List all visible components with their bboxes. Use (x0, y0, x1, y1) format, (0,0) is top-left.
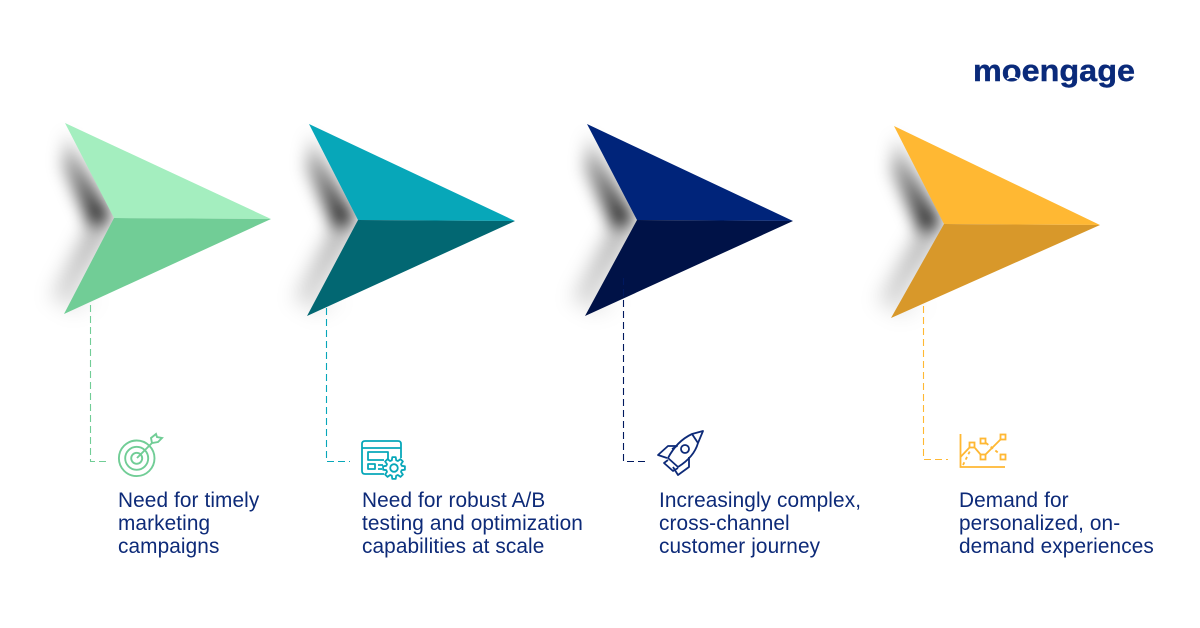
text: step 3: cross-channel (659, 512, 790, 534)
connector 2 (326, 308, 350, 462)
text: step 2: Need for robust A/B (362, 488, 545, 512)
connector 4 (924, 306, 948, 460)
text: step 4: personalized, on- (959, 512, 1120, 534)
text: step 4: demand experiences (959, 534, 1154, 558)
logo: moengage (973, 53, 1135, 88)
icon: browser with gear (362, 441, 405, 479)
text: step 1: campaigns (118, 534, 219, 558)
icon: target (119, 434, 162, 476)
arrow 4: yellow (877, 126, 1100, 318)
text: step 1 (118, 488, 260, 558)
text: step 2: capabilities at scale (362, 534, 544, 558)
text: step 3 (659, 488, 861, 558)
text: step 2 (362, 488, 583, 558)
text: step 3: customer journey (659, 534, 820, 558)
icon: chart (960, 434, 1006, 467)
text: step 1: marketing (118, 512, 210, 534)
text: step 3: Increasingly complex, (659, 488, 861, 512)
arrow 2: teal (293, 124, 515, 316)
text: step 4: Demand for (959, 488, 1069, 512)
connector 3 (624, 278, 648, 462)
text: step 2: testing and optimization (362, 512, 583, 534)
arrow 1: green (50, 123, 271, 314)
arrow 3: navy (571, 124, 793, 316)
text: step 4 (959, 488, 1154, 558)
connector 1 (90, 305, 110, 462)
icon: rocket (658, 431, 703, 475)
text: step 1: Need for timely (118, 488, 259, 512)
